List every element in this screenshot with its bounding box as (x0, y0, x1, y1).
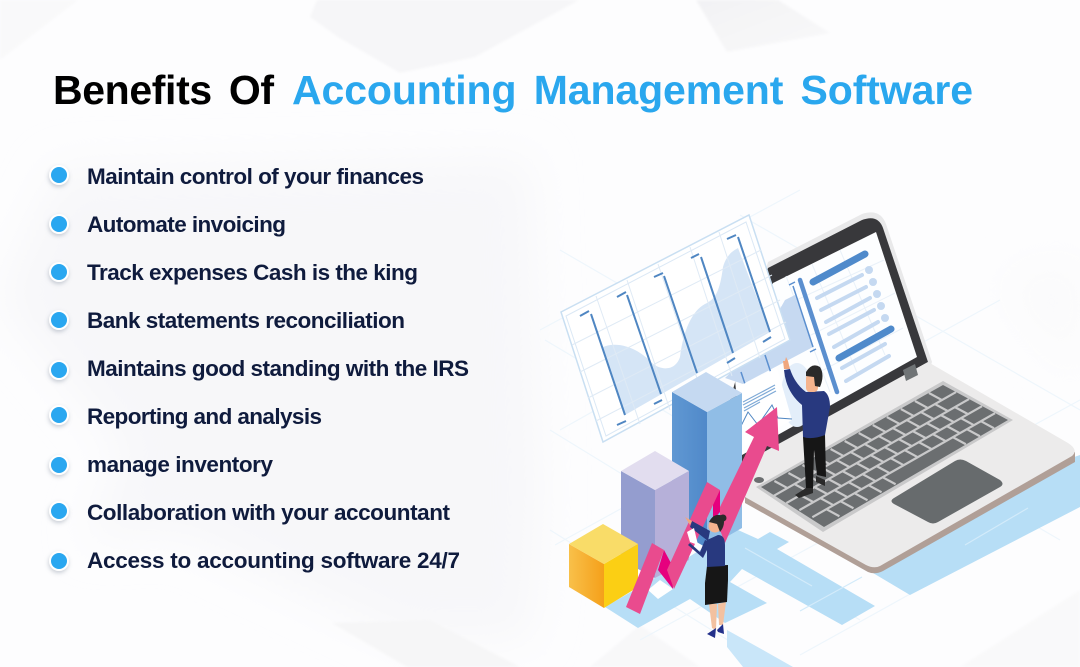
hinge (903, 364, 918, 381)
item: inventory: manage inventory (87, 452, 273, 477)
laptop base (742, 362, 1075, 573)
keyboard (756, 381, 1013, 532)
light blue floor shapes (605, 455, 1080, 667)
touchpad dot (754, 477, 764, 483)
floating chart panel (561, 215, 790, 442)
isometric floor grid (540, 190, 1080, 660)
title: Benefits Of (53, 67, 274, 113)
laptop (725, 212, 1075, 573)
cube: yellow (569, 524, 638, 608)
bar: blue (672, 372, 742, 548)
item: access: Access to accounting software 24/7 (87, 548, 460, 573)
chart grid (572, 232, 786, 424)
trackpad (892, 460, 1002, 524)
chart lines (580, 235, 771, 425)
growth arrow (626, 407, 779, 614)
title: Accounting Management Software (292, 67, 973, 113)
item: accountant: Collaboration with your accountant (87, 500, 450, 525)
man figure (783, 357, 830, 498)
item: expenses: Track expenses Cash is the king (87, 260, 418, 285)
screen content (725, 254, 891, 427)
laptop lid (730, 212, 932, 480)
chart area (603, 248, 770, 415)
item: IRS: Maintains good standing with the IRS (87, 356, 469, 381)
bar: purple (621, 451, 689, 578)
item: reporting: Reporting and analysis (87, 404, 322, 429)
benefits list (49, 164, 469, 573)
small report document (737, 368, 792, 446)
item: finances: Maintain control of your finances (87, 164, 424, 189)
item: reconciliation: Bank statements reconciliation (87, 308, 405, 333)
woman figure (685, 514, 728, 638)
item: invoicing: Automate invoicing (87, 212, 286, 237)
